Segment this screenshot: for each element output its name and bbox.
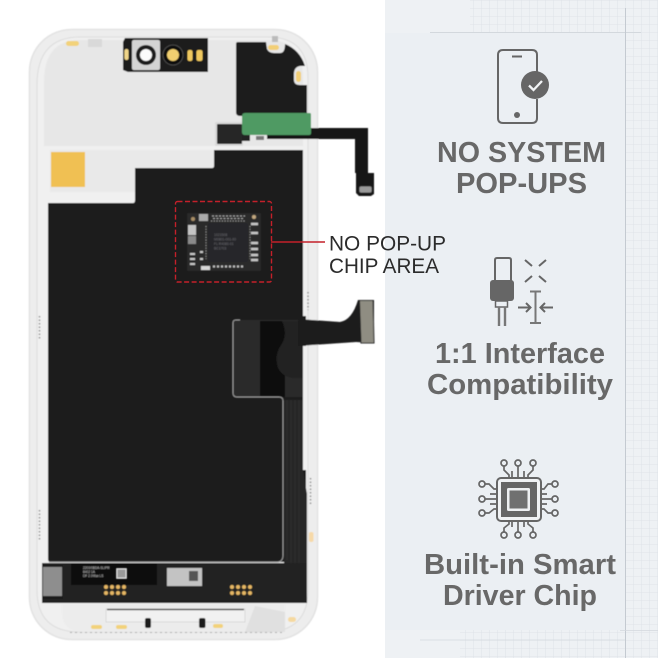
top right shield [236,36,307,116]
heading: built-in smart driver chip [424,549,616,612]
board label text [83,566,110,578]
icon: connector and fit [490,258,553,326]
side pad [309,532,314,542]
IC marking: BC1703 [214,246,226,250]
IC marking: FL R4080-01 [214,242,234,246]
side buttons [40,292,310,540]
chip board [187,213,261,271]
small top pads [66,41,79,46]
callout leader line [271,241,325,243]
IC marking: 1021508 [214,233,227,237]
callout label: NO POP-UP [329,232,446,256]
gold contact dots [104,585,252,595]
heading: no system pop-ups: POP-UPS [456,168,587,200]
callout label: CHIP AREA [329,254,440,278]
flex connector head [359,186,372,193]
top flex cable [267,128,374,196]
board label text: DF 2.0Max LS [83,574,103,578]
callout label [329,232,446,278]
heading: built-in smart driver chip: Built-in Smart [424,549,616,581]
lower flex [49,300,374,603]
phone screen assembly [30,30,374,640]
board label text: 8402 1A [83,570,96,574]
phone frame [30,30,318,640]
black shield [48,150,306,562]
heading: interface compatibility: 1:1 Interface [435,338,605,370]
heading: no system pop-ups [437,137,606,200]
board label text: 2200/0BDA-SLIPR [83,566,110,570]
bottom frame details [62,604,296,632]
IC marking [214,233,236,250]
icon: driver chip [479,460,558,538]
camera cutout [123,38,208,72]
heading: interface compatibility: Compatibility [427,369,613,401]
heading: no system pop-ups: NO SYSTEM [437,137,606,169]
heading: built-in smart driver chip: Driver Chip [443,580,597,612]
green tape [242,113,311,135]
callout box: red dashed [176,202,272,282]
panel: features background [385,0,658,658]
driver IC [208,223,248,262]
camera connector [215,122,264,146]
bottom board [42,563,307,603]
heading: interface compatibility [427,338,613,401]
icon: phone with check [498,50,549,123]
yellow tape [51,152,85,187]
IC marking: M0801-001-00 [214,238,236,242]
